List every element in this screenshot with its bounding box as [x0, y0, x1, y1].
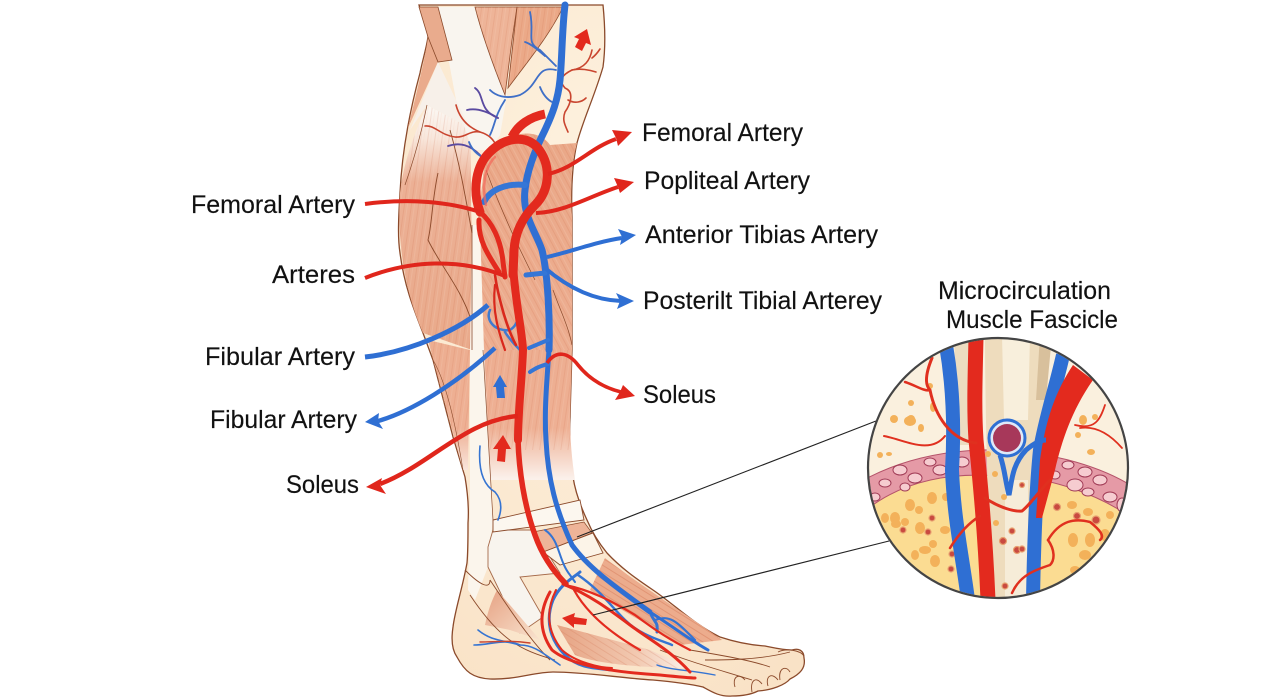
dorsal foot fibres	[590, 558, 722, 645]
label: Microcirculation: Microcirculation	[938, 277, 1111, 305]
arrow: Soleus right	[547, 354, 635, 400]
foot arteries	[480, 584, 695, 678]
outer lower leg fibres	[428, 340, 470, 440]
muscle: heel	[485, 590, 540, 640]
labels	[191, 119, 1118, 499]
fat globules	[877, 383, 1114, 574]
red main vessel	[975, 338, 988, 600]
circle background	[868, 338, 1128, 598]
retinaculum strap lower	[543, 533, 603, 565]
main artery	[476, 114, 566, 584]
arrow: Popliteal Artery	[536, 178, 634, 213]
muscle: instep	[557, 625, 690, 668]
muscle: top right	[508, 7, 563, 88]
label: Femoral Artery right: Femoral Artery	[642, 119, 803, 147]
label: Popliteal Artery: Popliteal Artery	[644, 167, 810, 195]
band cells	[870, 457, 1127, 512]
ankle retinaculum block	[488, 530, 560, 633]
arrow: Soleus left	[366, 416, 518, 494]
muscle: outer lower leg	[428, 340, 470, 470]
label: Posterilt Tibial Arterey: Posterilt Tibial Arterey	[643, 287, 882, 315]
small veins upper thigh	[448, 12, 556, 158]
white tendon: shin	[468, 225, 493, 600]
arrow: Fibular Artery lower	[365, 348, 495, 429]
red branches	[884, 358, 1122, 593]
anatomy outlines	[405, 105, 804, 692]
red thick vessel right	[1036, 365, 1093, 518]
callout leader lines	[577, 421, 889, 615]
instep fibres	[557, 625, 690, 668]
arrow: Femoral Artery right	[548, 130, 632, 174]
label: Fibular Artery upper: Fibular Artery	[205, 343, 355, 371]
thigh fibres	[399, 105, 472, 350]
side cream strip	[954, 342, 969, 445]
calf fibres	[478, 134, 577, 350]
small arrow: red up	[493, 435, 511, 462]
blood cells	[900, 482, 1100, 589]
fat layer	[874, 476, 1120, 596]
white tendon: iliotibial	[410, 62, 470, 130]
column lower shading	[1005, 480, 1028, 600]
muscle: upper outer strip	[408, 37, 438, 128]
small arteries upper thigh	[425, 49, 600, 143]
magnified circle: microcirculation	[866, 336, 1130, 600]
arrow: Arteres left	[365, 263, 505, 278]
arrow: Fibular Artery upper	[365, 305, 488, 357]
label: Femoral Artery left: Femoral Artery	[191, 191, 355, 219]
centre column	[985, 339, 1044, 597]
small arrow: blue up	[493, 375, 507, 398]
retinaculum strap upper	[493, 500, 584, 532]
small arrow: knee	[574, 29, 591, 51]
label: Fibular Artery lower: Fibular Artery	[210, 406, 357, 434]
top muscle fibres	[475, 7, 563, 95]
muscle: top centre	[475, 7, 517, 95]
label: Muscle Fascicle: Muscle Fascicle	[946, 306, 1118, 334]
circle border	[868, 338, 1128, 598]
leg silhouette	[398, 5, 804, 696]
muscle: left thigh	[399, 105, 472, 350]
arrow: Femoral Artery left	[365, 201, 480, 212]
muscle: ankle fragment	[533, 522, 592, 552]
label: Soleus right: Soleus	[643, 381, 716, 409]
white tendon: upper thigh	[438, 7, 507, 150]
arrow: Posterior Tibial	[545, 268, 634, 309]
muscle: top left	[419, 7, 452, 62]
label: Arteres: Arteres	[272, 261, 355, 289]
label: Anterior Tibias Artery: Anterior Tibias Artery	[645, 221, 879, 249]
leg illustration	[398, 5, 804, 696]
vein: foot branches	[474, 446, 715, 675]
column edge shading	[1036, 346, 1050, 400]
muscle: calf and lower leg	[478, 134, 577, 480]
blue vessels	[946, 345, 1063, 600]
vessel node	[989, 420, 1046, 495]
small arrow: foot	[562, 613, 587, 628]
column shading	[1002, 335, 1030, 420]
muscle: dorsal foot	[590, 558, 722, 645]
lower leg fibres	[483, 350, 572, 450]
label: Soleus left: Soleus	[286, 471, 359, 499]
muscle band	[870, 449, 1126, 510]
main vein	[484, 5, 708, 650]
arrow: Anterior Tibial	[547, 229, 636, 257]
